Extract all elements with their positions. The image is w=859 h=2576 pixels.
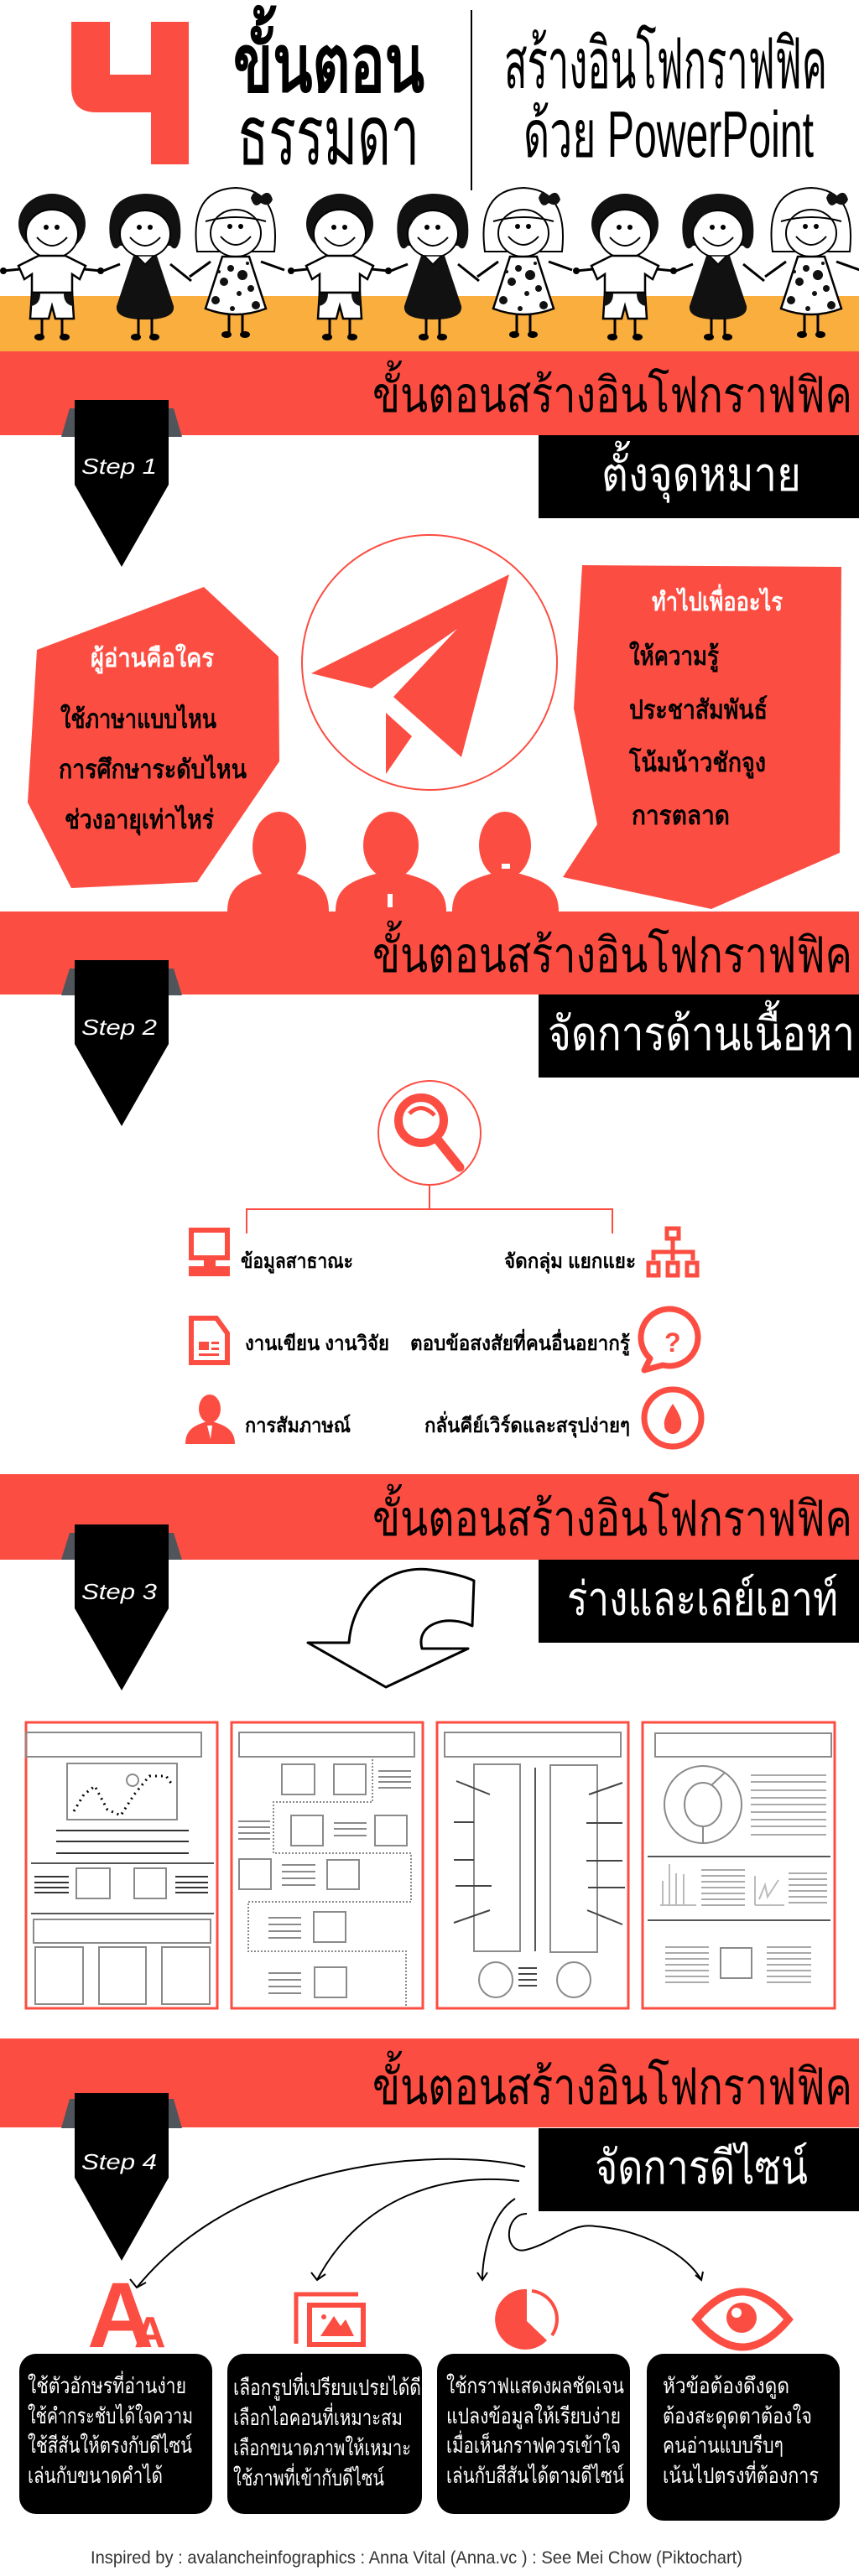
panel: audience: การศึกษาระดับไหน bbox=[59, 754, 247, 784]
box: image tips: ใช้ภาพที่เข้ากับดีไซน์ bbox=[233, 2463, 384, 2490]
title: big red 4 bbox=[71, 22, 189, 164]
box: headline tips: คนอ่านแบบรีบๆ bbox=[663, 2433, 784, 2458]
box: headline tips bbox=[647, 2354, 840, 2521]
ribbon: Step 2: Step 2 bbox=[81, 1015, 158, 1040]
box: chart tips: แปลงข้อมูลให้เรียบง่าย bbox=[446, 2403, 621, 2429]
ribbon: Step 1 bbox=[61, 400, 182, 567]
icon: pie chart bbox=[495, 2289, 557, 2350]
panel: audience bbox=[28, 587, 279, 888]
ribbon: Step 3: Step 3 bbox=[81, 1579, 158, 1604]
box: typography tips: ใช้คำกระชับได้ใจความ bbox=[28, 2403, 193, 2428]
icon: font Aa: A bbox=[134, 2309, 166, 2357]
ribbon: Step 2 bbox=[61, 960, 182, 1126]
icon: magnifier bbox=[378, 1081, 481, 1185]
orange band bbox=[0, 296, 859, 351]
item: public data: ข้อมูลสาธาณะ bbox=[241, 1250, 353, 1274]
icon: audience silhouettes bbox=[227, 812, 559, 911]
ribbon: Step 4 bbox=[61, 2093, 182, 2261]
wireframe 1 bbox=[26, 1722, 217, 2008]
panel: purpose: การตลาด bbox=[632, 801, 730, 830]
panel: purpose: ให้ความรู้ bbox=[629, 641, 719, 673]
subtitle box: ตั้งจุดหมาย: ตั้งจุดหมาย bbox=[601, 441, 801, 503]
item: grouping bbox=[504, 1228, 697, 1275]
box: image tips: เลือกรูปที่เปรียบเปรยได้ดี bbox=[233, 2372, 421, 2401]
illustration: kids holding hands bbox=[0, 188, 859, 340]
item: writing & research: งานเขียน งานวิจัย bbox=[245, 1332, 389, 1355]
subtitle box: ร่างและเลย์เอาท์ bbox=[539, 1560, 859, 1643]
ribbon: Step 1: Step 1 bbox=[81, 454, 157, 479]
subtitle box: จัดการดีไซน์ bbox=[539, 2128, 859, 2211]
icon: font Aa: A bbox=[87, 2264, 154, 2367]
box: image tips bbox=[227, 2354, 422, 2514]
item: public data bbox=[189, 1230, 353, 1276]
item: keywords bbox=[424, 1389, 701, 1446]
subtitle box: ตั้งจุดหมาย bbox=[539, 435, 859, 518]
box: image tips: เลือกขนาดภาพให้เหมาะ bbox=[233, 2435, 411, 2460]
item: grouping: จัดกลุ่ม แยกแยะ bbox=[504, 1250, 636, 1275]
panel: purpose bbox=[563, 565, 841, 909]
item: answer questions: ตอบข้อสงสัยที่คนอื่นอยากรู้ bbox=[410, 1328, 630, 1356]
item: keywords: กลั่นคีย์เวิร์ดและสรุปง่ายๆ bbox=[424, 1410, 630, 1439]
ribbon: Step 3 bbox=[61, 1524, 182, 1690]
item: writing & research bbox=[191, 1318, 389, 1363]
wireframe 4 bbox=[643, 1722, 835, 2008]
box: chart tips: เล่นกับสีสันได้ตามดีไซน์ bbox=[446, 2463, 624, 2488]
banner: step 2 bbox=[0, 911, 859, 995]
title: ขั้นตอน ธรรมดา bbox=[233, 4, 424, 183]
title: ขั้นตอน ธรรมดา: ขั้นตอน bbox=[233, 4, 424, 109]
connector lines bbox=[247, 1185, 612, 1233]
box: headline tips: หัวข้อต้องดึงดูด bbox=[663, 2373, 789, 2399]
panel: audience: ช่วงอายุเท่าไหร่ bbox=[65, 804, 214, 836]
banner: step 3 bbox=[0, 1474, 859, 1560]
panel: purpose: ทำไปเพื่ออะไร bbox=[652, 584, 783, 616]
ribbon: Step 4: Step 4 bbox=[81, 2149, 157, 2174]
box: typography tips bbox=[19, 2354, 212, 2514]
title: ขั้นตอน ธรรมดา: ธรรมดา bbox=[237, 89, 419, 183]
panel: purpose: โน้มน้าวชักจูง bbox=[628, 747, 766, 779]
box: headline tips: ต้องสะดุดตาต้องใจ bbox=[663, 2403, 812, 2429]
box: chart tips: เมื่อเห็นกราฟควรเข้าใจ bbox=[446, 2430, 621, 2458]
icon: paper plane in circle bbox=[302, 535, 557, 790]
box: image tips: เลือกไอคอนที่เหมาะสม bbox=[233, 2402, 403, 2430]
item: answer questions: ? bbox=[664, 1327, 681, 1358]
panel: purpose: ประชาสัมพันธ์ bbox=[629, 695, 768, 724]
title: สร้างอินโฟกราฟฟิค ด้วย PowerPoint bbox=[504, 24, 827, 171]
subtitle box: จัดการดีไซน์: จัดการดีไซน์ bbox=[595, 2141, 808, 2194]
footer credits: Inspired by : avalancheinfographics : Anna Vital (Anna.vc ) : See Mei Chow (Piktochart) bbox=[91, 2548, 742, 2568]
item: interview: การสัมภาษณ์ bbox=[245, 1414, 351, 1437]
wireframe 2 bbox=[232, 1722, 423, 2008]
box: typography tips: ใช้ตัวอักษรที่อ่านง่าย bbox=[28, 2371, 186, 2398]
wireframe 3 bbox=[437, 1722, 628, 2008]
panel: audience: ใช้ภาษาแบบไหน bbox=[60, 704, 216, 734]
box: chart tips: ใช้กราฟแสดงผลชัดเจน bbox=[446, 2373, 624, 2398]
panel: audience: ผู้อ่านคือใคร bbox=[91, 643, 214, 674]
item: interview bbox=[185, 1394, 351, 1444]
box: typography tips: เล่นกับขนาดคำได้ bbox=[28, 2463, 163, 2488]
item: answer questions bbox=[410, 1309, 698, 1370]
icon: image bbox=[296, 2294, 363, 2345]
box: typography tips: ใช้สีสันให้ตรงกับดีไซน์ bbox=[28, 2433, 192, 2458]
icon: curved arrow bbox=[308, 1569, 474, 1687]
icon: eye bbox=[696, 2292, 789, 2347]
banner: step 1 bbox=[0, 351, 859, 435]
banner: step 4 bbox=[0, 2038, 859, 2127]
arrows: design connectors bbox=[130, 2159, 703, 2288]
subtitle box: จัดการด้านเนื้อหา bbox=[539, 995, 859, 1078]
box: headline tips: เน้นไปตรงที่ต้องการ bbox=[663, 2460, 819, 2488]
box: chart tips bbox=[437, 2354, 630, 2514]
